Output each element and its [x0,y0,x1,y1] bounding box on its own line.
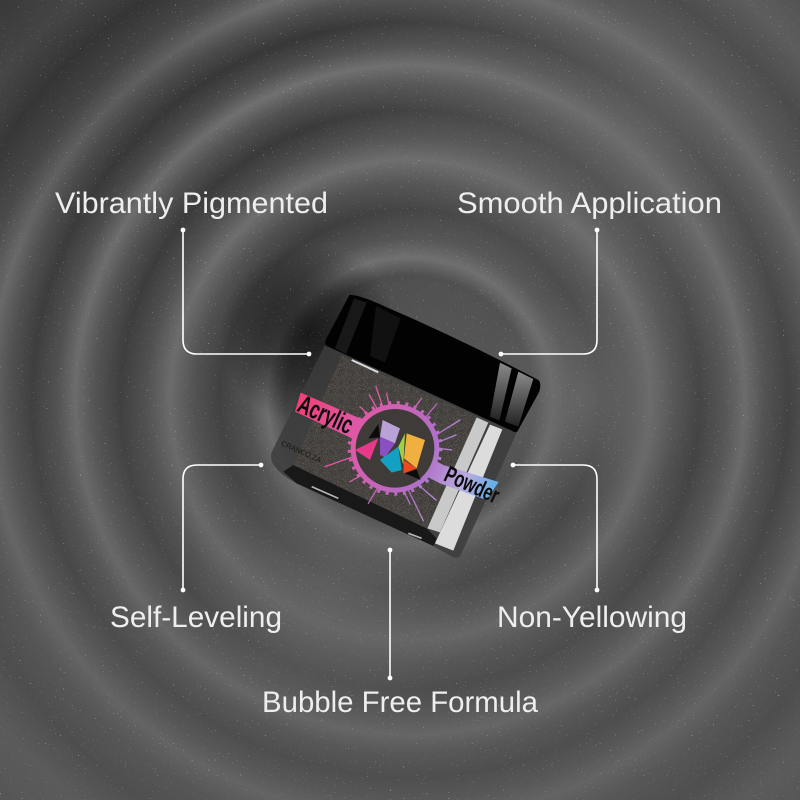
product jar [270,295,540,558]
callout: Bubble Free Formula: Bubble Free Formula [262,686,538,719]
callout: Smooth Application [457,187,722,356]
highlight under lid [352,360,378,372]
jar lid [325,295,540,432]
callout: Self-Leveling [110,463,282,634]
jar base shadow [283,465,437,546]
callout: Bubble Free Formula [262,548,538,719]
jar glass body [271,345,517,558]
base highlights [312,487,422,538]
powder contents [294,355,476,528]
callout: Smooth Application: Smooth Application [457,187,722,220]
colored label band [295,393,499,500]
band text: Powder: Powder [441,461,504,508]
small jar text: CRANCO.ZA [280,439,323,465]
callout: Vibrantly Pigmented: Vibrantly Pigmented [55,187,328,220]
splatter ring [325,387,460,521]
band text: Acrylic: Acrylic [294,389,358,440]
callout: Non-Yellowing [497,463,687,634]
callout: Self-Leveling: Self-Leveling [110,601,282,634]
callout: Non-Yellowing: Non-Yellowing [497,601,687,634]
logo [355,420,425,480]
callout: Vibrantly Pigmented [55,187,328,356]
right white label strip [427,417,502,551]
